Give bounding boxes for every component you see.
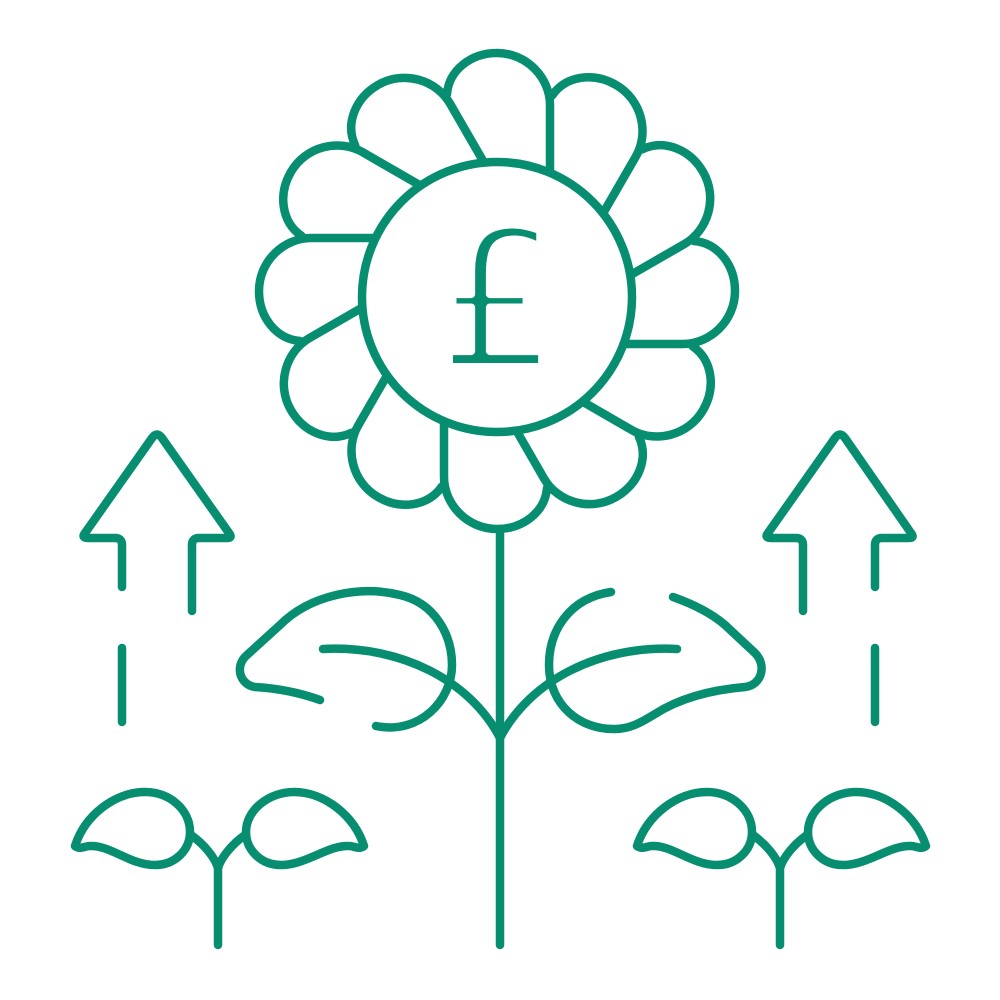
- pound sign: £: [437, 190, 559, 413]
- flower centre circle: [362, 162, 632, 432]
- flower stem: [496, 530, 504, 945]
- left large leaf: [240, 591, 500, 738]
- right large leaf: [500, 592, 762, 738]
- right sprout: [637, 792, 926, 945]
- left up arrow: [84, 434, 231, 722]
- icon: flower head: [259, 53, 735, 529]
- flower petals: [259, 53, 735, 529]
- right up arrow: [767, 434, 913, 722]
- left sprout: [75, 792, 364, 945]
